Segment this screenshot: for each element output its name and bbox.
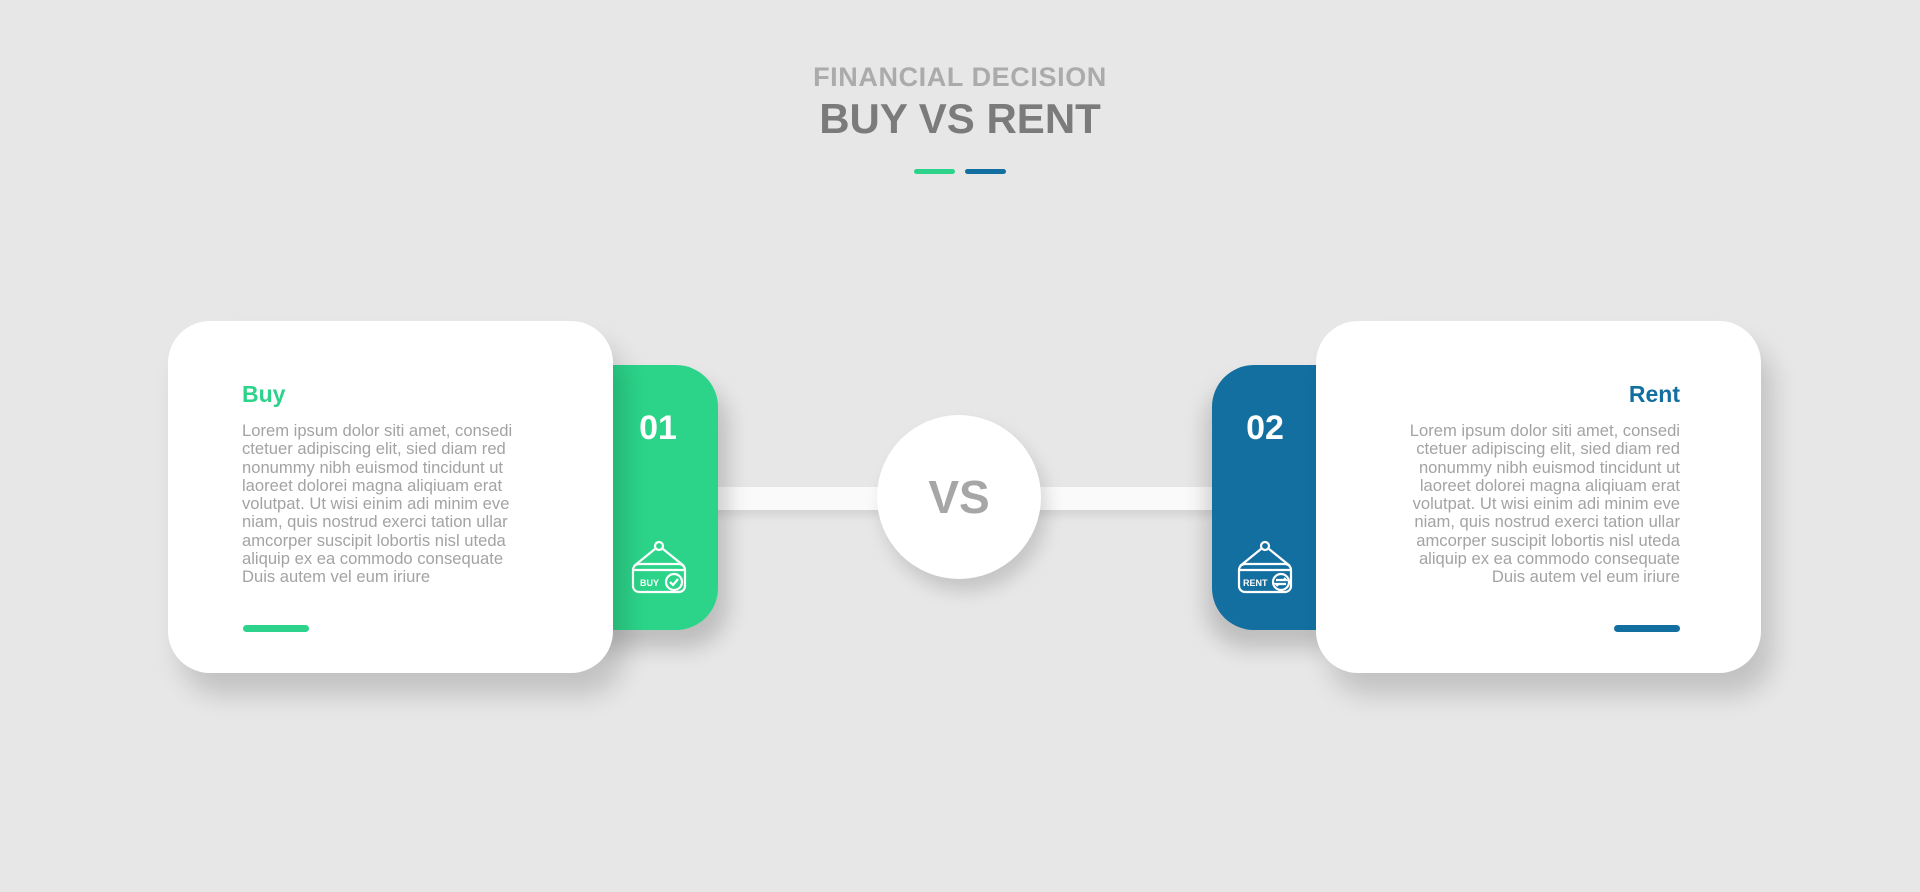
number 02: 02 [1246, 409, 1284, 447]
text block: buy description: Duis autem vel eum iriure [242, 567, 430, 586]
text block: rent description: niam, quis nostrud exerci tation ullar [1414, 512, 1680, 531]
panel: buy card [168, 321, 613, 673]
icon: buy tag: BUY [640, 578, 659, 588]
vs circle [877, 415, 1041, 579]
text block: buy description: Lorem ipsum dolor siti amet, consedi [242, 421, 512, 440]
vs circle: VS [928, 471, 990, 523]
tab: 01 green [590, 365, 718, 630]
text block: buy description: niam, quis nostrud exerci tation ullar [242, 512, 508, 531]
text block: buy description: amcorper suscipit lobortis nisl uteda [242, 531, 506, 550]
text block: buy description: nonummy nibh euismod tincidunt ut [242, 458, 503, 477]
title: BUY VS RENT [819, 95, 1101, 142]
tab: 02 blue [1212, 365, 1340, 630]
text block: rent description: amcorper suscipit lobortis nisl uteda [1416, 531, 1680, 550]
text block: buy description: volutpat. Ut wisi einim adi minim eve [242, 494, 509, 513]
panel: rent card [1316, 321, 1761, 673]
text block: buy description: laoreet dolorei magna aliqiuam erat [242, 476, 502, 495]
heading: Buy: Buy [242, 381, 285, 407]
icon: buy tag [632, 540, 686, 594]
text block: rent description: volutpat. Ut wisi einim adi minim eve [1413, 494, 1680, 513]
title [813, 62, 1107, 142]
accent bar green [243, 625, 309, 632]
number 01: 01 [639, 409, 677, 447]
connector bar [700, 487, 1230, 510]
icon: rent tag: RENT [1243, 578, 1268, 588]
text block: buy description: ctetuer adipiscing elit, sied diam red [242, 439, 506, 458]
text block: rent description: aliquip ex ea commodo consequate [1419, 549, 1680, 568]
text block: rent description: nonummy nibh euismod tincidunt ut [1419, 458, 1680, 477]
title underline accents [914, 169, 1006, 174]
text block: rent description: Lorem ipsum dolor siti amet, consedi [1410, 421, 1680, 440]
title: FINANCIAL DECISION [813, 62, 1107, 92]
icon: rent tag [1238, 540, 1292, 594]
text block: buy description: aliquip ex ea commodo consequate [242, 549, 503, 568]
text block: rent description: Duis autem vel eum iriure [1492, 567, 1680, 586]
text block: buy description [242, 421, 512, 586]
accent bar blue [1614, 625, 1680, 632]
text block: rent description [1410, 421, 1680, 586]
text block: rent description: laoreet dolorei magna aliqiuam erat [1420, 476, 1680, 495]
heading: Rent: Rent [1629, 381, 1680, 407]
text block: rent description: ctetuer adipiscing elit, sied diam red [1416, 439, 1680, 458]
